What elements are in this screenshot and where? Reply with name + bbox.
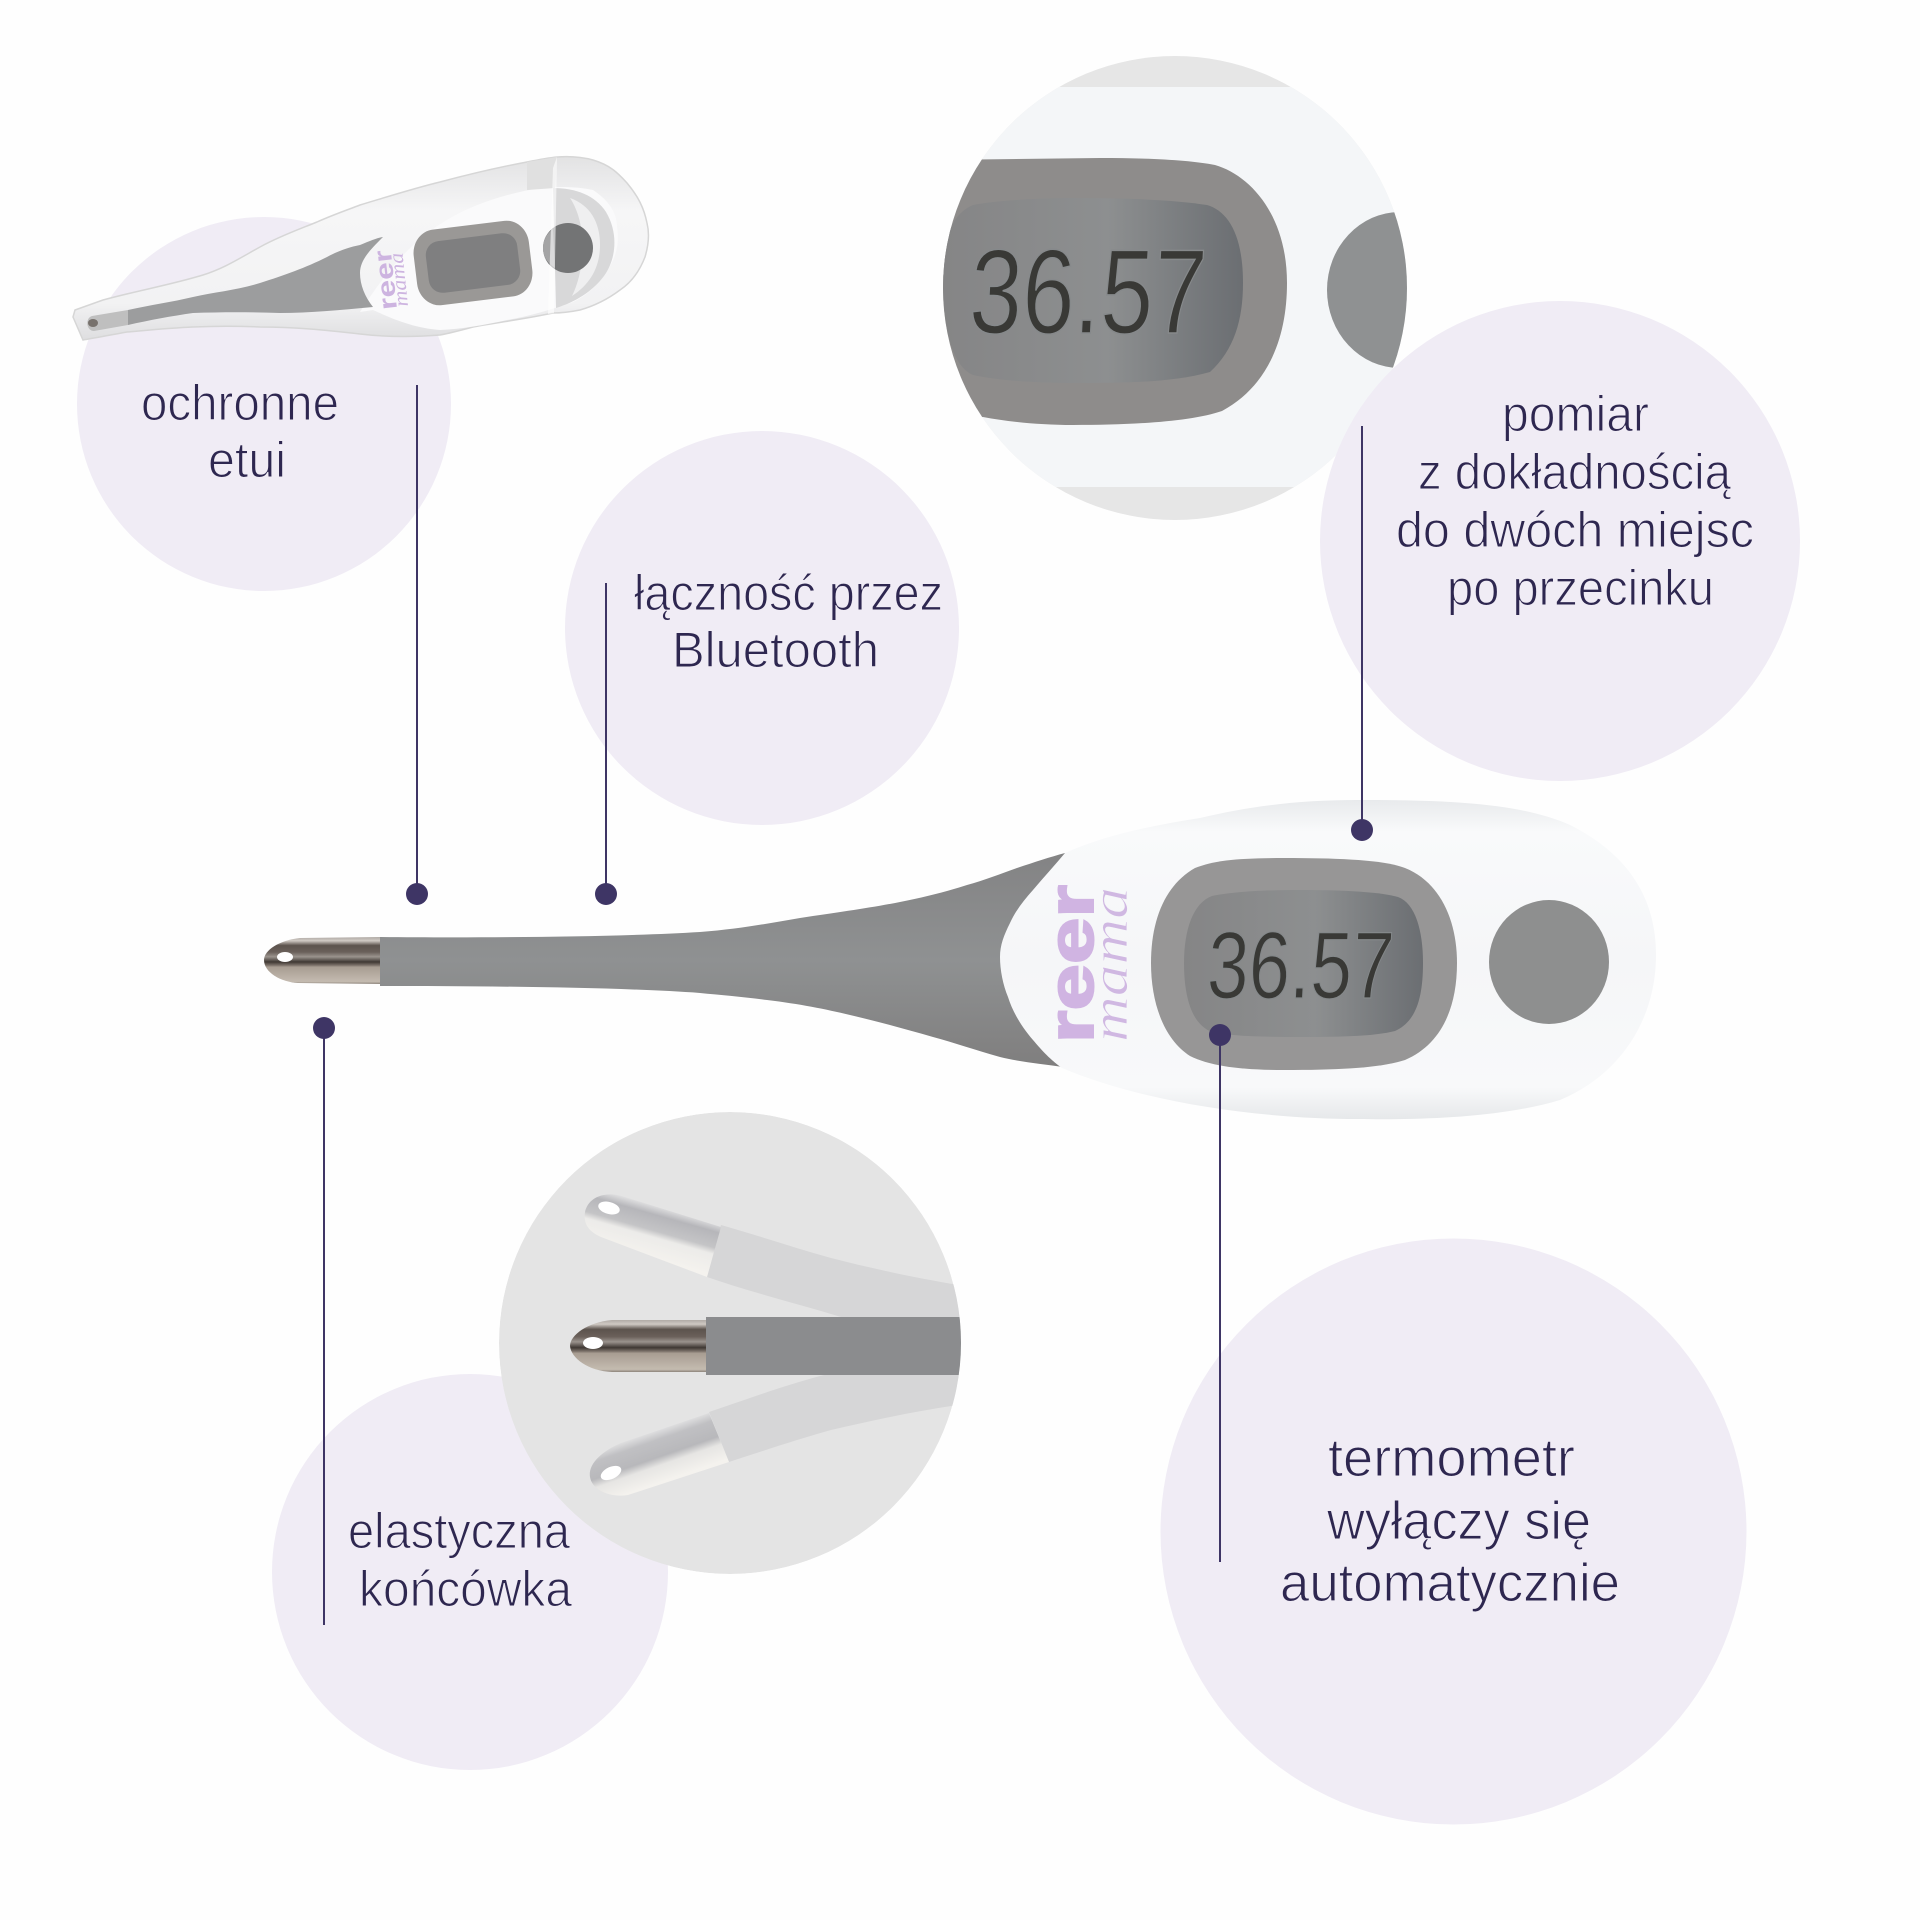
panel: bluetooth circle bbox=[565, 431, 959, 825]
logo: small reer mama: mama bbox=[385, 252, 413, 308]
lower flexed tip stem bbox=[709, 1375, 965, 1462]
metal tip bbox=[264, 937, 380, 984]
text: accuracy: po przecinku bbox=[1447, 560, 1714, 616]
panel: flexible tips close-up circle bbox=[499, 1112, 965, 1574]
panel: flexible tip circle bbox=[272, 1374, 668, 1770]
text: bluetooth bbox=[634, 565, 943, 678]
logo: small reer mama bbox=[369, 248, 413, 311]
callout line: bluetooth bbox=[595, 583, 617, 905]
power button bbox=[1489, 900, 1609, 1024]
main thermometer bbox=[264, 800, 1656, 1119]
panel: display close-up circle bbox=[943, 56, 1407, 520]
callout line: auto shut-off bbox=[1209, 1024, 1231, 1562]
panel: auto shut-off circle bbox=[1160, 1238, 1746, 1824]
tip highlight bbox=[277, 952, 293, 962]
centre tip highlight bbox=[583, 1337, 603, 1349]
text: auto shut-off: automatycznie bbox=[1280, 1553, 1620, 1613]
upper tip highlight bbox=[598, 1202, 620, 1214]
text: protective case: ochronne bbox=[141, 375, 339, 431]
display bezel close-up bbox=[930, 158, 1287, 425]
text: bluetooth: łączność przez bbox=[634, 565, 943, 621]
text: flexible tip bbox=[348, 1503, 572, 1617]
logo: small reer mama: reer bbox=[369, 248, 403, 311]
centre metal tip bbox=[570, 1320, 706, 1372]
text: flexible tip: elastyczna bbox=[348, 1503, 570, 1559]
text: protective case: etui bbox=[208, 432, 286, 488]
icon: button close-up bbox=[1327, 212, 1407, 368]
callout line: flexible tip bbox=[313, 1017, 335, 1625]
text: auto shut-off: wyłączy się bbox=[1326, 1491, 1591, 1551]
lower flexed metal tip bbox=[590, 1413, 729, 1496]
centre stem bbox=[706, 1317, 965, 1375]
text: accuracy: do dwóch miejsc bbox=[1396, 502, 1754, 558]
upper flexed metal tip bbox=[585, 1194, 721, 1277]
display screen close-up bbox=[943, 198, 1243, 383]
LCD reading close-up: 36.57 bbox=[967, 225, 1210, 359]
text: bluetooth: Bluetooth bbox=[672, 622, 879, 678]
display bezel bbox=[1151, 858, 1457, 1070]
logo: reer: reer bbox=[1035, 885, 1107, 1043]
white housing bbox=[1000, 800, 1656, 1119]
upper flexed tip stem bbox=[707, 1225, 965, 1330]
lower tip highlight bbox=[600, 1466, 622, 1480]
panel: protective case circle bbox=[77, 217, 451, 591]
text: protective case bbox=[141, 375, 339, 488]
text: auto shut-off: termometr bbox=[1328, 1428, 1575, 1488]
text: auto shut-off bbox=[1280, 1428, 1620, 1613]
LCD reading: 36.57 bbox=[1205, 913, 1396, 1019]
text: flexible tip: końcówka bbox=[359, 1561, 572, 1617]
panel: accuracy circle bbox=[1320, 301, 1800, 781]
grey flexible stem bbox=[380, 853, 1080, 1068]
display screen bbox=[1184, 890, 1423, 1037]
logo: mama: mama bbox=[1082, 887, 1139, 1042]
icon: thermometer in protective case bbox=[73, 157, 648, 340]
text: accuracy: z dokładnością bbox=[1418, 444, 1731, 500]
callout line: case bbox=[406, 385, 428, 905]
callout line: accuracy bbox=[1351, 426, 1373, 841]
text: accuracy bbox=[1396, 386, 1754, 616]
text: accuracy: pomiar bbox=[1502, 386, 1649, 442]
